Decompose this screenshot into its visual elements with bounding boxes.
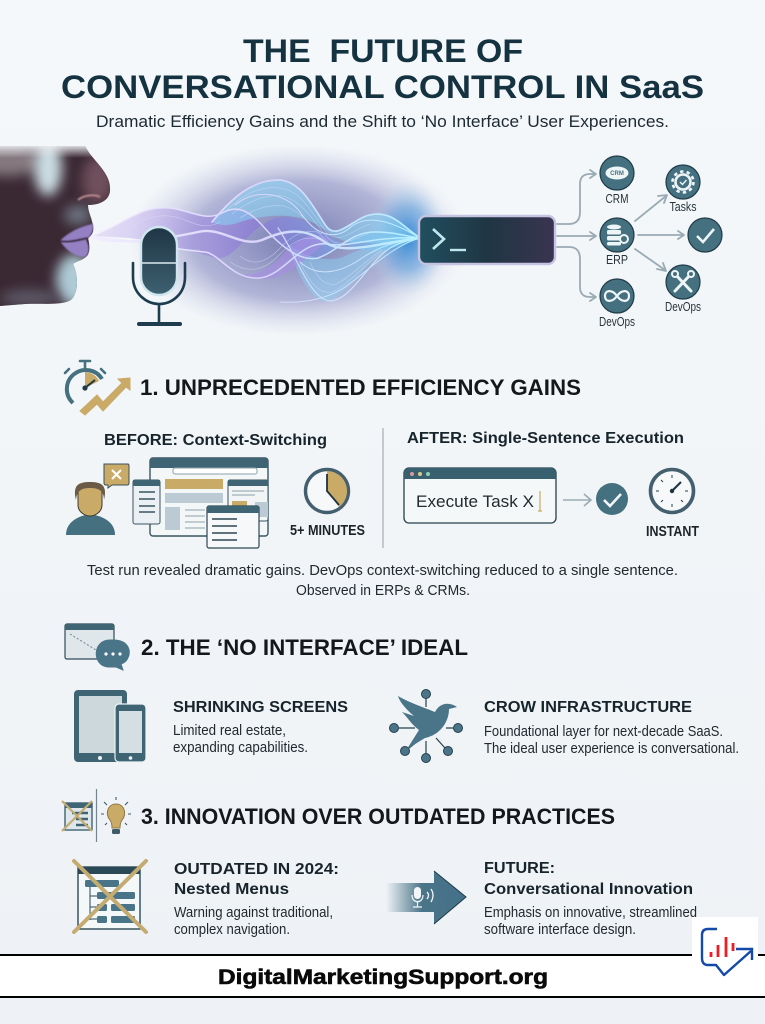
- section 1 description: Test run revealed dramatic gains. DevOps context-switching reduced to a single sentence.: [87, 562, 678, 579]
- arrow to check: [563, 494, 591, 506]
- wave glow background: [128, 144, 468, 336]
- section 1: efficiency gains: [65, 361, 699, 599]
- icon: instant gauge: [650, 470, 694, 512]
- node: ERP: ERP: [606, 252, 628, 267]
- node: CRM: CRM: [610, 171, 624, 177]
- command window: [404, 468, 556, 523]
- section 3: innovation: [62, 789, 697, 938]
- label: instant: INSTANT: [646, 523, 699, 540]
- icon: window with chat bubble: [65, 624, 129, 670]
- icon: crossed nested menus: [74, 861, 146, 932]
- heading 1: 1. UNPRECEDENTED EFFICIENCY GAINS: [140, 375, 581, 400]
- title: [61, 33, 704, 105]
- node: DevOps tools: DevOps: [665, 299, 701, 314]
- mesh lines: [132, 188, 386, 292]
- after heading: AFTER: Single-Sentence Execution: [407, 430, 684, 447]
- outdated text: Nested Menus: [174, 881, 289, 898]
- node: Tasks: Tasks: [670, 199, 697, 214]
- shrinking screens text: [173, 699, 348, 756]
- node: check: [688, 218, 722, 252]
- shrinking screens text: Limited real estate,: [173, 722, 286, 739]
- logo: chart speech bubble: [692, 917, 758, 982]
- heading 3: 3. INNOVATION OVER OUTDATED PRACTICES: [141, 804, 615, 829]
- hero: voice to command illustration: [0, 140, 722, 336]
- section 1 description: [87, 562, 678, 599]
- node: DevOps tools: [665, 265, 701, 314]
- icon: crow network: [390, 690, 462, 762]
- node: CRM: [600, 156, 634, 206]
- node: CRM: CRM: [606, 191, 628, 206]
- subtitle: Dramatic Efficiency Gains and the Shift to ‘No Interface’ User Experiences.: [96, 112, 669, 131]
- outdated text: OUTDATED IN 2024:: [174, 861, 339, 878]
- future text: Conversational Innovation: [484, 881, 693, 898]
- crow infrastructure text: Foundational layer for next-decade SaaS.: [484, 723, 723, 740]
- crow infrastructure text: CROW INFRASTRUCTURE: [484, 699, 692, 716]
- arrow: voice forward: [386, 871, 466, 924]
- future text: Emphasis on innovative, streamlined: [484, 904, 697, 921]
- command window: Execute Task X: [416, 492, 534, 511]
- lips: [60, 224, 93, 257]
- shrinking screens text: expanding capabilities.: [173, 739, 308, 756]
- label: 5+ minutes: 5+ MINUTES: [290, 522, 365, 539]
- future text: [484, 860, 697, 938]
- icon: stacked app windows: [133, 458, 268, 548]
- face profile: [0, 146, 110, 306]
- future text: software interface design.: [484, 921, 636, 938]
- shrinking screens text: SHRINKING SCREENS: [173, 699, 348, 716]
- section 2: no interface: [65, 624, 739, 762]
- sound waves: [92, 180, 420, 302]
- terminal prompt box: [419, 216, 555, 264]
- icon: tablet and phone: [74, 690, 146, 762]
- icon: check: [596, 483, 628, 515]
- node: DevOps loop: DevOps: [599, 314, 635, 329]
- footer band: [0, 954, 765, 997]
- outdated text: complex navigation.: [174, 921, 290, 938]
- icon: frustrated user: [66, 464, 129, 535]
- node: ERP: [600, 218, 634, 267]
- routing arrows: [557, 170, 684, 301]
- heading 2: 2. THE ‘NO INTERFACE’ IDEAL: [141, 635, 468, 660]
- footer website text: DigitalMarketingSupport.org: [218, 966, 548, 989]
- outdated text: [174, 861, 339, 938]
- crow infrastructure text: [484, 699, 739, 757]
- section 1 description: Observed in ERPs & CRMs.: [296, 582, 470, 599]
- divider: [382, 428, 384, 548]
- title: THE FUTURE OF: [243, 33, 523, 69]
- node: Tasks: [666, 165, 700, 214]
- future text: FUTURE:: [484, 860, 555, 877]
- icon: stopwatch with rising arrow: [65, 361, 130, 415]
- icon: microphone: [133, 227, 185, 324]
- before heading: BEFORE: Context-Switching: [104, 432, 327, 449]
- icon: crossed menu and lightbulb: [62, 789, 131, 842]
- title: CONVERSATIONAL CONTROL IN SaaS: [61, 69, 704, 105]
- outdated text: Warning against traditional,: [174, 904, 333, 921]
- node: DevOps loop: [599, 279, 635, 329]
- icon: clock five minutes: [306, 470, 348, 512]
